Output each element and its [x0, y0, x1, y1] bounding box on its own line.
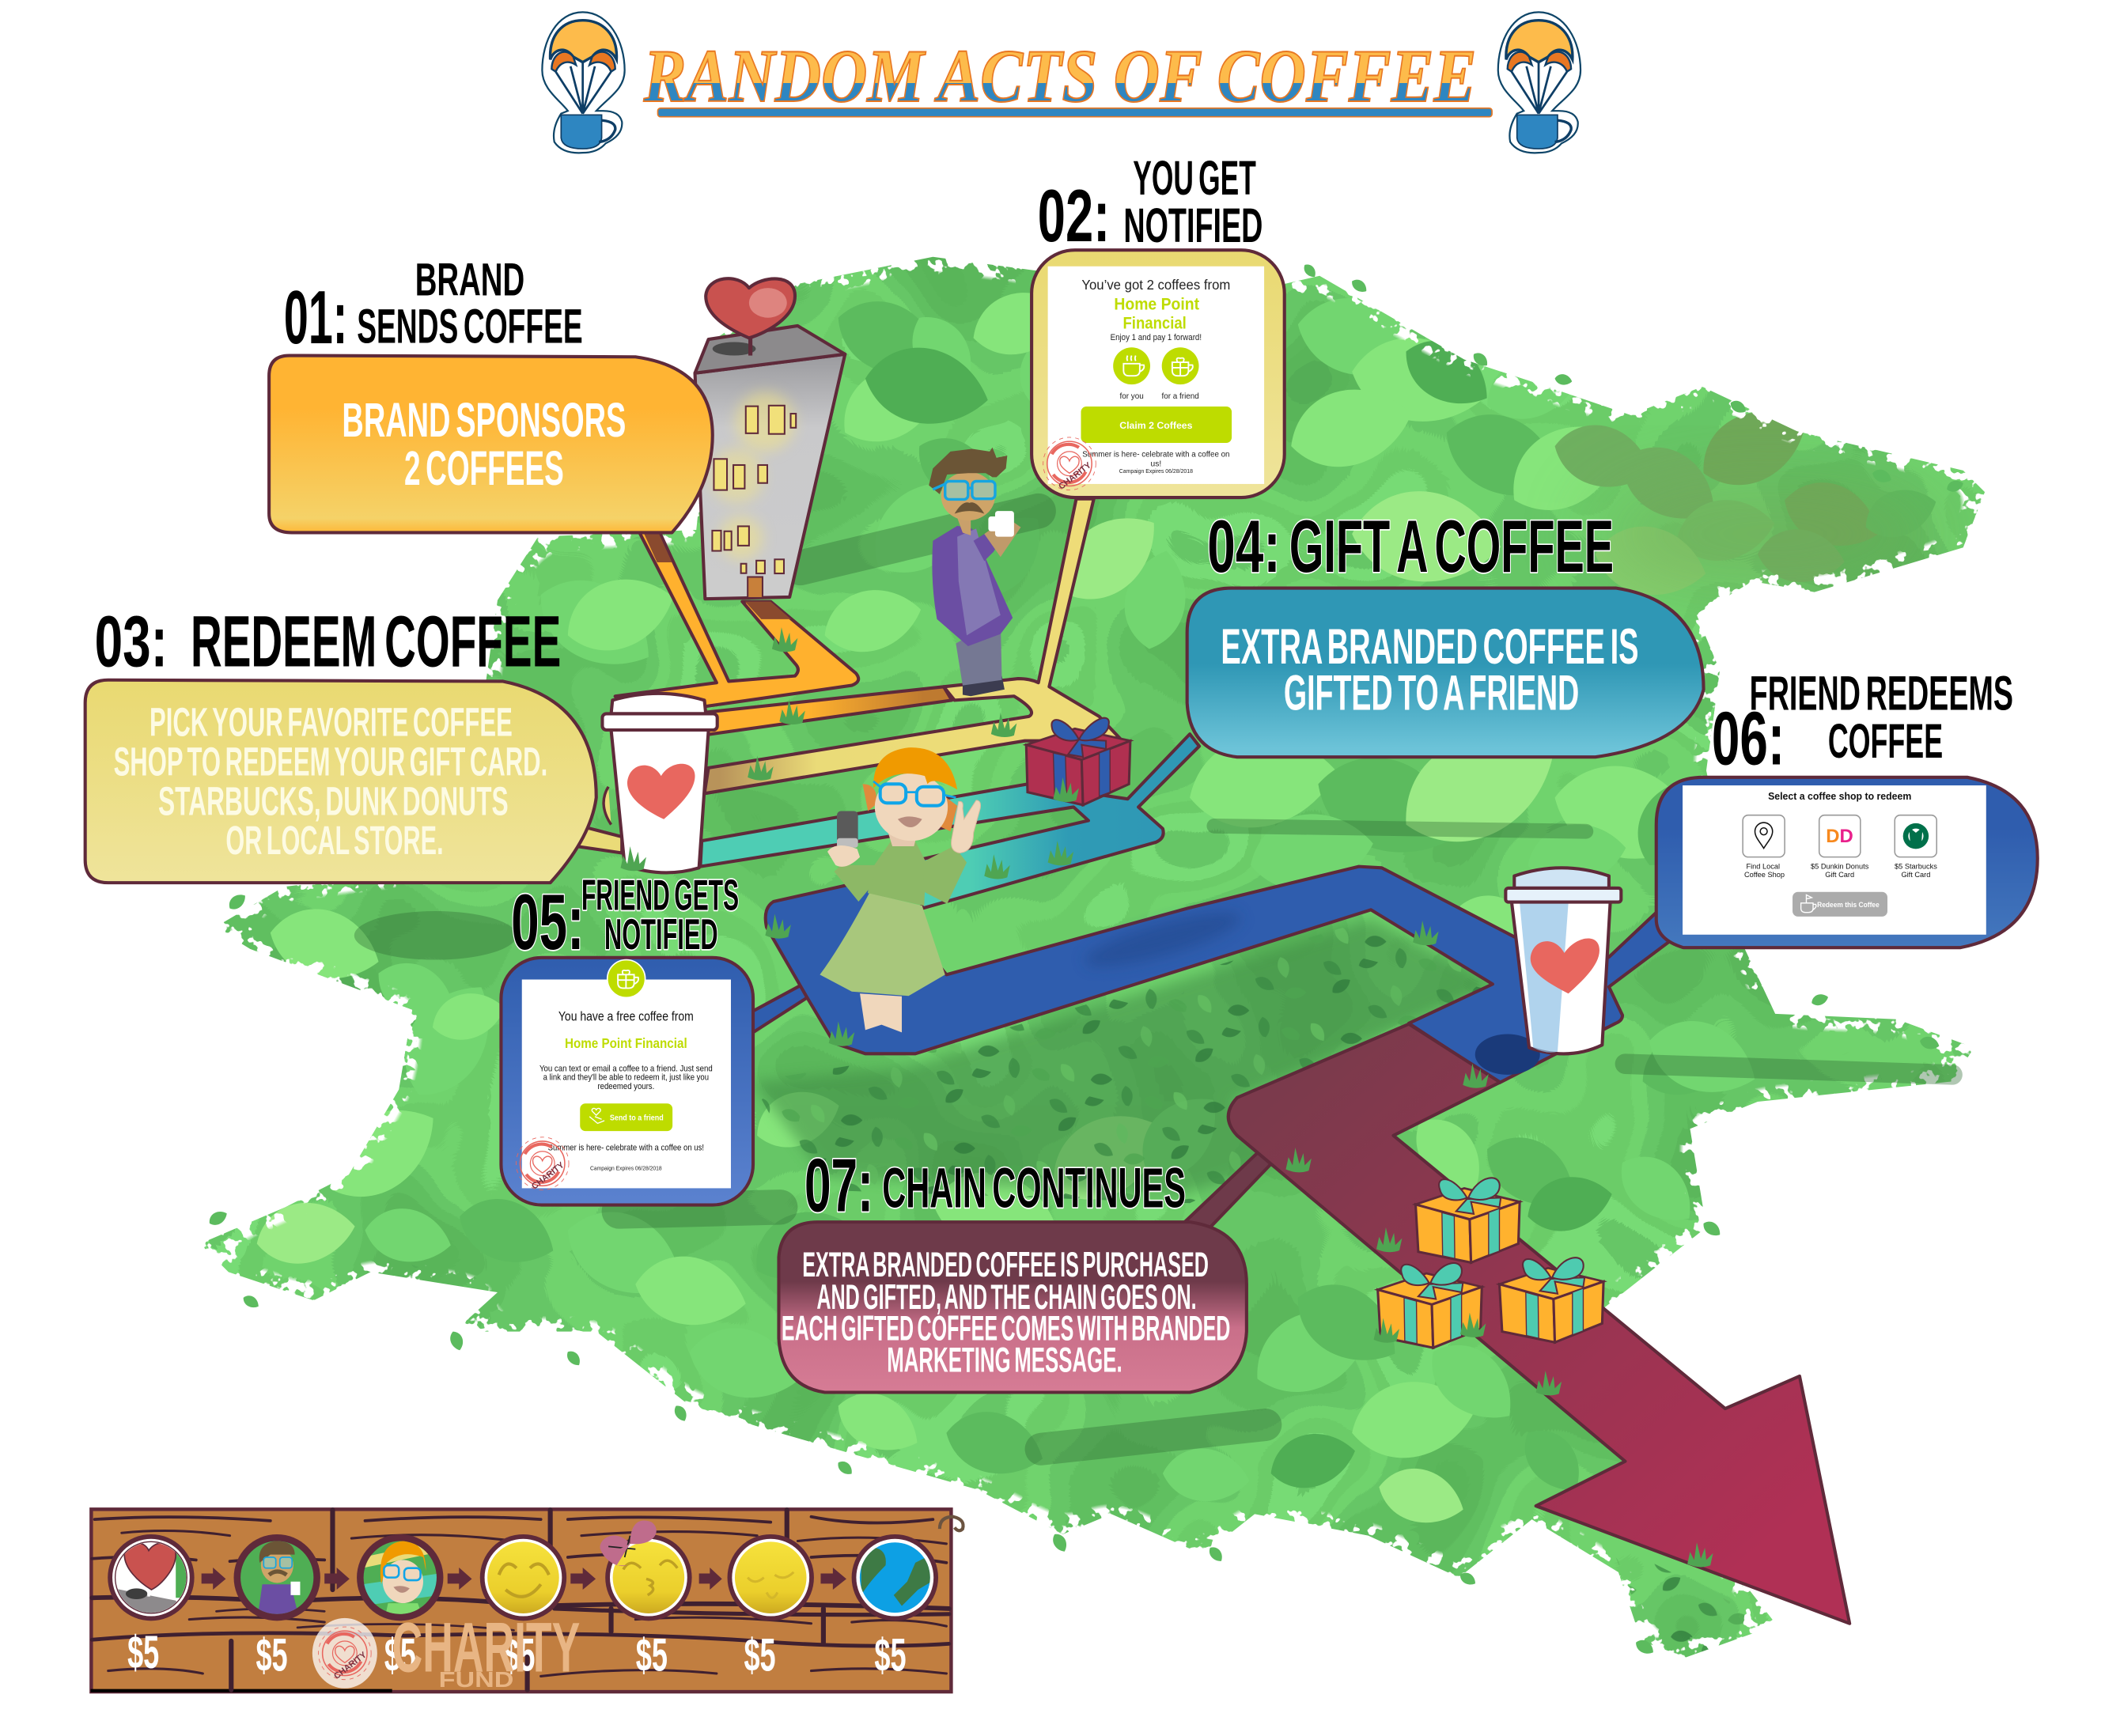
panel: step 03 redeem coffee — [85, 680, 596, 883]
coffee cup: blue wash — [1475, 868, 1621, 1075]
gifts: three yellow boxes — [1378, 1178, 1603, 1348]
panel: step 02 notification card: for you — [1119, 392, 1144, 401]
icon: gift cup — [1172, 358, 1193, 376]
panel: step 06 select coffee shop — [1656, 777, 2038, 947]
panel: step 02 notification card: Claim 2 Coffees — [1119, 420, 1193, 431]
icon: charity stamp: CHARITY — [1057, 460, 1093, 492]
coffee cup: white — [576, 694, 717, 872]
step 02 heading: YOU GET — [1133, 151, 1256, 206]
panel: step 03 redeem coffee: STARBUCKS, DUNK DONUTS — [158, 779, 509, 824]
charity fund logo: CHARITY — [332, 1650, 369, 1681]
step 06 heading: 06: — [1712, 697, 1785, 781]
five dollar labels: $5 — [503, 1630, 535, 1681]
panel: step 01 brand sponsors: 2 COFFEES — [404, 441, 564, 496]
step 01 heading: SENDS COFFEE — [357, 299, 583, 354]
foliage background — [200, 257, 1985, 1657]
panel: step 02 notification card: us! — [1151, 460, 1161, 469]
panel: step 06 select coffee shop: Gift Card — [1825, 871, 1854, 879]
panel: step 05 friend notification card: You have a free coffee from — [558, 1009, 694, 1023]
icon: map pin — [1755, 823, 1773, 849]
panel: step 04 gift a coffee: EXTRA BRANDED COFFEE IS — [1221, 619, 1639, 675]
panel: step 02 notification card: Home Point — [1114, 294, 1199, 313]
five dollar labels: $5 — [636, 1630, 668, 1681]
step 05 heading: 05: — [511, 879, 584, 966]
five dollar labels — [127, 1627, 907, 1681]
panel: step 03 redeem coffee: SHOP TO REDEEM YOUR GIFT CARD. — [114, 739, 547, 784]
panel: step 05 friend notification card: Campaign Expires 06/28/2018 — [590, 1166, 662, 1172]
step 03 heading — [95, 600, 561, 683]
road: maroon arrow — [1179, 1024, 1849, 1624]
road: orange start from brand — [615, 532, 952, 737]
panel: step 06 select coffee shop: $5 Dunkin Donuts — [1811, 863, 1869, 871]
panel: step 02 notification card: Enjoy 1 and pay 1 forward! — [1111, 333, 1202, 342]
character: woman with phone — [820, 747, 981, 1032]
panel: step 03 redeem coffee: PICK YOUR FAVORITE COFFEE — [150, 700, 513, 745]
panel: step 03 redeem coffee: OR LOCAL STORE. — [225, 818, 444, 863]
five dollar labels: $5 — [127, 1627, 159, 1678]
icon: cup with flag — [1801, 895, 1816, 913]
icon: hand with heart — [589, 1108, 604, 1123]
charity fund logo: CHARITY — [392, 1609, 580, 1687]
panel: step 05 friend notification card: redeemed yours. — [597, 1082, 654, 1091]
panel: step 02 notification card: Summer is here- celebrate with a coffee on — [1082, 451, 1230, 460]
step 02 heading: NOTIFIED — [1123, 199, 1263, 253]
icon: coffee logo — [1903, 823, 1929, 849]
panel: step 04 gift a coffee: GIFTED TO A FRIEND — [1284, 665, 1579, 720]
road: yellow notification — [704, 499, 1122, 793]
five dollar labels: $5 — [384, 1630, 416, 1681]
step 06 heading — [1712, 666, 2013, 781]
charity fund logo — [312, 1609, 580, 1692]
medallion: sleeping face — [728, 1534, 814, 1621]
edge leaves — [206, 262, 1965, 1657]
grass tufts — [621, 627, 1713, 1567]
five dollar labels: $5 — [744, 1630, 776, 1681]
panel: step 01 brand sponsors — [269, 356, 713, 532]
title: RANDOM ACTS OF COFFEE — [643, 34, 1476, 118]
icon: DD logo: DD — [1826, 826, 1853, 847]
step 07 heading: 07: — [804, 1143, 873, 1227]
panel: step 02 notification card: Campaign Expires 06/28/2018 — [1119, 468, 1193, 475]
panel: step 06 select coffee shop: Gift Card — [1901, 871, 1930, 879]
panel: step 06 select coffee shop: Coffee Shop — [1744, 871, 1785, 879]
panel: step 04 gift a coffee — [1187, 588, 1704, 757]
panel: step 07 chain continues: EXTRA BRANDED COFFEE IS PURCHASED — [802, 1246, 1209, 1284]
panel: step 06 select coffee shop: Select a coffee shop to redeem — [1768, 790, 1911, 802]
step 01 heading: BRAND — [415, 254, 524, 305]
five dollar labels: $5 — [874, 1630, 907, 1681]
panel: step 05 friend notification card: Home Point Financial — [565, 1035, 687, 1051]
panel: step 06 select coffee shop: Find Local — [1747, 863, 1780, 871]
panel: step 02 notification card: for a friend — [1161, 392, 1199, 401]
panel: step 06 select coffee shop: Redeem this Coffee — [1817, 901, 1880, 910]
step 04 heading: 04: — [1207, 505, 1281, 588]
icon: coffee cup — [1123, 356, 1144, 376]
step 01 heading: 01: — [284, 275, 347, 360]
step 07 heading — [804, 1143, 1186, 1227]
panel: step 06 select coffee shop: $5 Starbucks — [1895, 863, 1937, 871]
icon: charity stamp — [1043, 437, 1096, 492]
panel: step 01 brand sponsors: BRAND SPONSORS — [342, 393, 626, 448]
step 02 heading — [1038, 151, 1263, 257]
medallion: heart balloon — [108, 1534, 195, 1622]
title — [542, 12, 1581, 153]
icon: charity stamp — [516, 1137, 569, 1192]
step 07 heading: CHAIN CONTINUES — [882, 1156, 1186, 1220]
panel: step 02 notification card: You’ve got 2 coffees from — [1081, 277, 1230, 293]
panel: step 05 friend notification card — [501, 958, 753, 1205]
panel: step 02 notification card — [1032, 250, 1285, 497]
icon: charity stamp: CHARITY — [530, 1160, 566, 1192]
panel: step 02 notification card: Financial — [1122, 313, 1187, 332]
panel: step 07 chain continues: AND GIFTED, AND THE CHAIN GOES ON. — [816, 1278, 1197, 1317]
panel: step 05 friend notification card: Summer is here- celebrate with a coffee on us! — [548, 1144, 704, 1153]
icon: gift cup — [618, 970, 638, 988]
character: man with coffee — [929, 448, 1020, 696]
nail hook — [940, 1517, 963, 1530]
step 05 heading — [511, 870, 739, 966]
step 04 heading: GIFT A COFFEE — [1289, 505, 1614, 588]
step 02 heading: 02: — [1038, 174, 1110, 257]
medallion: smiling face — [480, 1534, 566, 1621]
road: blue friend — [751, 867, 1674, 1083]
medallion: woman — [357, 1534, 444, 1622]
foliage shadows — [354, 511, 1952, 1449]
panel: step 07 chain continues: MARKETING MESSAGE. — [887, 1341, 1122, 1380]
building with heart balloon — [695, 278, 845, 599]
step 04 heading — [1207, 505, 1614, 588]
step 05 heading: NOTIFIED — [604, 910, 718, 959]
step 03 heading: REDEEM COFFEE — [191, 600, 561, 683]
road: teal gift — [700, 734, 1199, 909]
step 01 heading — [284, 254, 583, 360]
panel: step 05 friend notification card: You can text or email a coffee to a friend. Just send — [539, 1065, 713, 1074]
medallion: globe — [852, 1534, 938, 1621]
panel: charity fund wood sign — [91, 1509, 963, 1692]
gift: red with blue ribbon — [1026, 718, 1130, 805]
panel: step 07 chain continues: EACH GIFTED COFFEE COMES WITH BRANDED — [782, 1310, 1230, 1348]
five dollar labels: $5 — [256, 1630, 288, 1681]
charity fund logo: FUND — [439, 1667, 513, 1692]
medallion: kissing face with bow — [600, 1520, 692, 1621]
step 06 heading: COFFEE — [1828, 714, 1943, 769]
panel: step 05 friend notification card: a link and they'll be able to redeem it, just like you — [543, 1073, 709, 1083]
step 03 heading: 03: — [95, 600, 168, 683]
panel: step 05 friend notification card: Send to a friend — [610, 1114, 664, 1122]
medallion: man — [234, 1534, 320, 1622]
step 05 heading: FRIEND GETS — [581, 870, 739, 919]
panel: step 07 chain continues — [778, 1222, 1247, 1392]
arrows between medallions — [202, 1568, 846, 1590]
